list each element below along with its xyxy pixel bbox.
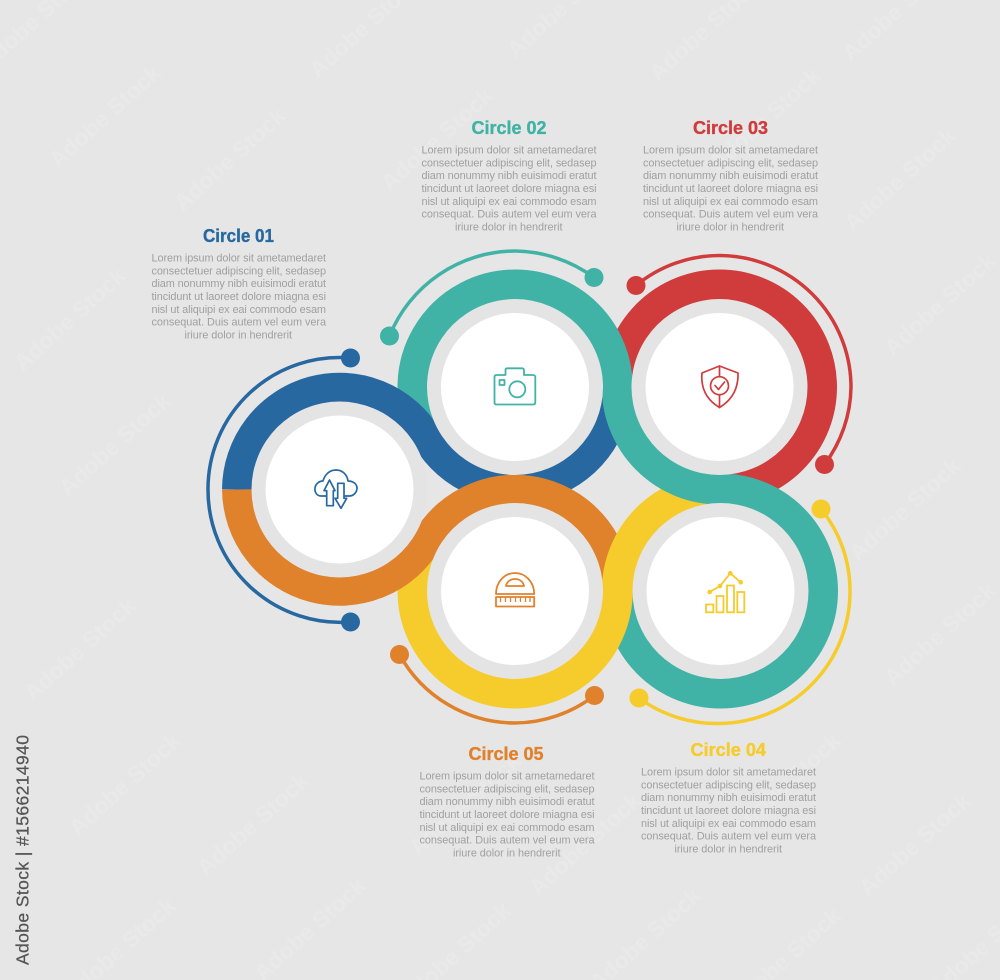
text block: Circle 05: consequat. Duis autem vel eum vera [420, 835, 595, 847]
text: Adobe Stock [169, 102, 291, 216]
text: Adobe Stock [64, 727, 186, 841]
circle 05 hub [427, 503, 603, 679]
icon: shield with check [702, 366, 738, 408]
heading: Circle 01: Circle 01 [203, 226, 274, 246]
text block: Circle 05: Lorem ipsum dolor sit ametamedaret [420, 770, 594, 782]
text block: Circle 02: tincidunt ut laoreet dolore miagna esi [422, 183, 596, 195]
icon: cloud transfer [315, 470, 357, 508]
circle 01 hub [252, 402, 428, 578]
arc connector: circle 05 [390, 645, 604, 723]
text block: Circle 02: consequat. Duis autem vel eum vera [422, 209, 597, 221]
icon: bar chart with trend line [706, 571, 744, 612]
text block: Circle 02 [422, 144, 597, 234]
heading: Circle 04: Circle 04 [690, 740, 766, 760]
text block: Circle 05: nisl ut aliquipi ex eai commodo esam [420, 822, 594, 834]
text block: Circle 03: diam nonummy nibh euisimodi eratut [643, 170, 818, 182]
text: Adobe Stock [879, 247, 1000, 361]
text block: Circle 05: tincidunt ut laoreet dolore miagna esi [420, 809, 594, 821]
text: Adobe Stock [704, 62, 826, 176]
text: Adobe Stock [839, 122, 961, 236]
text block: Circle 05: consectetuer adipiscing elit, sedasep [420, 783, 594, 795]
text block: Circle 01: diam nonummy nibh euisimodi eratut [152, 278, 326, 290]
text block: Circle 02: nisl ut aliquipi ex eai commodo esam [422, 196, 596, 208]
text: Adobe Stock [844, 452, 966, 566]
icon: camera [494, 368, 535, 404]
heading: Circle 02: Circle 02 [472, 118, 546, 138]
text block: Circle 03 [643, 144, 819, 234]
text block: Circle 04: tincidunt ut laoreet dolore miagna esi [641, 805, 816, 817]
text: Adobe Stock [44, 59, 166, 173]
arc connector: circle 04 [630, 500, 850, 724]
text: Adobe Stock [404, 747, 526, 861]
text: Adobe Stock [9, 262, 131, 376]
vertical stock id text: Adobe Stock | #1566214940 [12, 735, 32, 965]
text block: Circle 03: consequat. Duis autem vel eum vera [643, 209, 819, 221]
text block: Circle 01: Lorem ipsum dolor sit ametamedaret [152, 252, 326, 264]
text: Adobe Stock [19, 592, 141, 706]
text block: Circle 01: tincidunt ut laoreet dolore miagna esi [152, 291, 326, 303]
text block: Circle 04: Lorem ipsum dolor sit ametamedaret [641, 766, 816, 778]
text block: Circle 02: diam nonummy nibh euisimodi eratut [422, 170, 596, 182]
circle 02 hub [427, 299, 603, 475]
heading: Circle 03: Circle 03 [693, 118, 768, 138]
text block: Circle 02: Lorem ipsum dolor sit ametamedaret [422, 144, 596, 156]
circle 04 hub [632, 503, 808, 679]
text block: Circle 04: nisl ut aliquipi ex eai commodo esam [641, 818, 816, 830]
arc connector: circle 02 [380, 251, 604, 346]
text block: Circle 03: nisl ut aliquipi ex eai commodo esam [643, 196, 818, 208]
text block: Circle 01 [152, 252, 327, 342]
text block: Circle 01: consectetuer adipiscing elit, sedasep [152, 265, 326, 277]
text block: Circle 05 [420, 770, 595, 860]
text block: Circle 04: consequat. Duis autem vel eum vera [641, 831, 817, 843]
text block: Circle 04: consectetuer adipiscing elit, sedasep [641, 779, 816, 791]
arc connector: circle 03 [626, 256, 851, 474]
text block: Circle 03: consectetuer adipiscing elit, sedasep [643, 157, 818, 169]
text block: Circle 04: iriure dolor in hendrerit [674, 844, 782, 856]
text: Adobe Stock [854, 787, 976, 901]
text block: Circle 04: diam nonummy nibh euisimodi eratut [641, 792, 816, 804]
text block: Circle 04 [641, 766, 817, 856]
text block: Circle 03: tincidunt ut laoreet dolore miagna esi [643, 183, 818, 195]
text: Adobe Stock [879, 577, 1000, 691]
circle 03 hub [632, 299, 808, 475]
text: Adobe Stock [54, 387, 176, 501]
text block: Circle 03: iriure dolor in hendrerit [676, 222, 784, 234]
text block: Circle 01: iriure dolor in hendrerit [184, 330, 292, 342]
text block: Circle 02: consectetuer adipiscing elit, sedasep [422, 157, 596, 169]
interlocking circle ribbons [238, 285, 822, 693]
text: Adobe Stock [724, 727, 846, 841]
icon: protractor and ruler [496, 573, 534, 606]
text block: Circle 05: diam nonummy nibh euisimodi eratut [420, 796, 594, 808]
arc connector: circle 01 [208, 348, 360, 632]
text block: Circle 01: consequat. Duis autem vel eum vera [152, 317, 327, 329]
text block: Circle 05: iriure dolor in hendrerit [453, 848, 560, 860]
text: Adobe Stock [376, 82, 498, 196]
text: Adobe Stock [524, 787, 646, 901]
text block: Circle 03: Lorem ipsum dolor sit ametamedaret [643, 144, 818, 156]
text block: Circle 01: nisl ut aliquipi ex eai commodo esam [152, 304, 326, 316]
text block: Circle 02: iriure dolor in hendrerit [455, 222, 562, 234]
text: Adobe Stock [192, 767, 314, 881]
heading: Circle 05: Circle 05 [468, 744, 544, 764]
